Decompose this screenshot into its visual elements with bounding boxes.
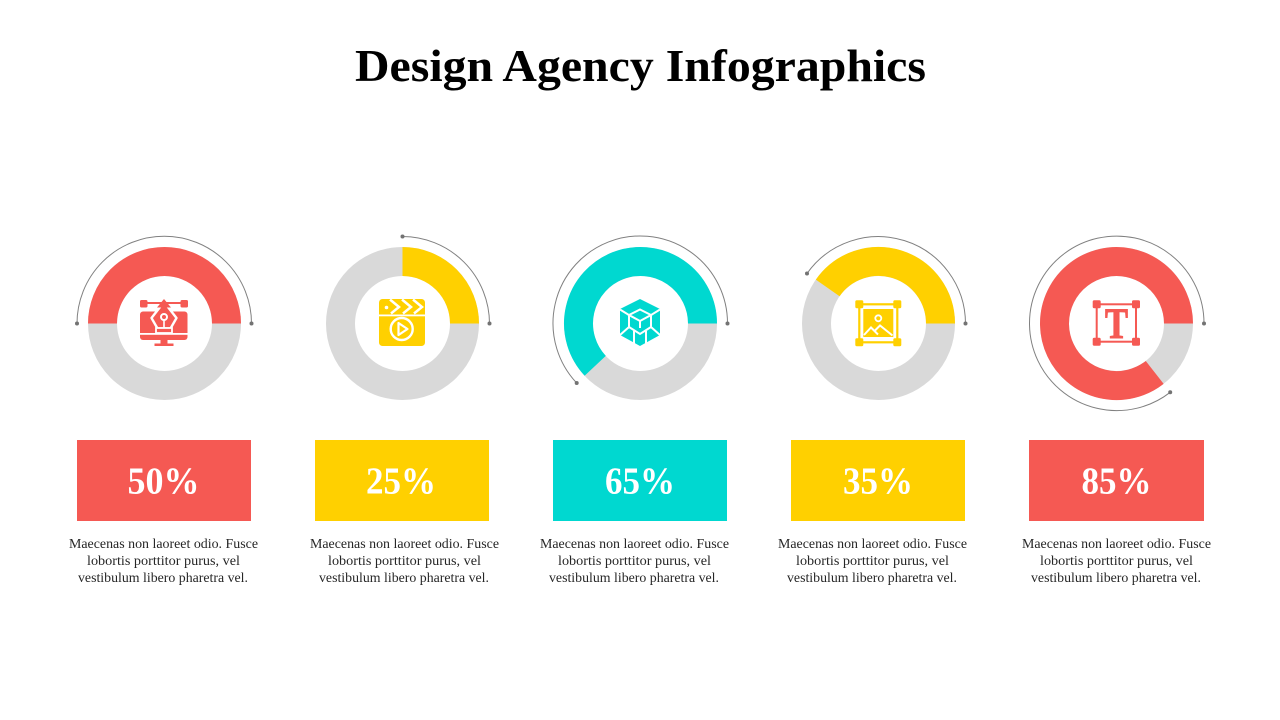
description text: vestibulum libero pharetra vel. [319,571,489,586]
arc indicator: 50% [75,236,254,326]
value box: 65% [553,440,727,521]
description text: lobortis porttitor purus, vel [1040,554,1193,569]
description text: vestibulum libero pharetra vel. [1031,571,1201,586]
value box: 50%: 50% [128,460,200,502]
description text [310,537,499,586]
panel: 50 percent [69,236,258,586]
description text: lobortis porttitor purus, vel [796,554,949,569]
description text: vestibulum libero pharetra vel. [787,571,957,586]
description text: Maecenas non laoreet odio. Fusce [1022,537,1211,552]
description text: Maecenas non laoreet odio. Fusce [778,537,967,552]
icon: image frame [855,300,901,346]
value box: 25% [315,440,489,521]
donut chart: 35% [816,261,940,386]
arc indicator: 85% [1030,236,1206,411]
description text: lobortis porttitor purus, vel [328,554,481,569]
arc indicator: 35% [805,237,968,326]
panel: 25 percent [310,234,499,586]
value box: 35% [791,440,965,521]
description text: Maecenas non laoreet odio. Fusce [540,537,729,552]
icon: text tool [1093,300,1140,348]
description text: vestibulum libero pharetra vel. [78,571,248,586]
description text: lobortis porttitor purus, vel [558,554,711,569]
value box: 65%: 65% [605,460,675,502]
value box: 85%: 85% [1082,460,1152,502]
panel: 85 percent [1022,236,1211,586]
donut chart: 25% [340,262,464,386]
description text: Maecenas non laoreet odio. Fusce [310,537,499,552]
value box: 25%: 25% [366,460,436,502]
value box: 85% [1029,440,1204,521]
donut chart: 50% [102,262,226,386]
value box: 35%: 35% [843,460,913,502]
donut chart: 65% [578,261,702,386]
description text: Maecenas non laoreet odio. Fusce [69,537,258,552]
arc indicator: 25% [400,234,492,326]
description text [778,537,967,586]
icon: 3D cube [620,299,660,346]
description text: vestibulum libero pharetra vel. [549,571,719,586]
description text: lobortis porttitor purus, vel [87,554,240,569]
description text [69,537,258,586]
arc indicator: 65% [553,236,730,385]
title: Design Agency Infographics [355,40,926,91]
donut chart: 85% [1054,262,1178,386]
panel: 65 percent [540,236,730,586]
description text [540,537,729,586]
icon: text tool: T [1105,301,1128,348]
value box: 50% [77,440,251,521]
icon: pen tool on monitor [140,299,188,346]
panel: 35 percent [778,237,968,586]
icon: video clapperboard [379,299,425,346]
description text [1022,537,1211,586]
